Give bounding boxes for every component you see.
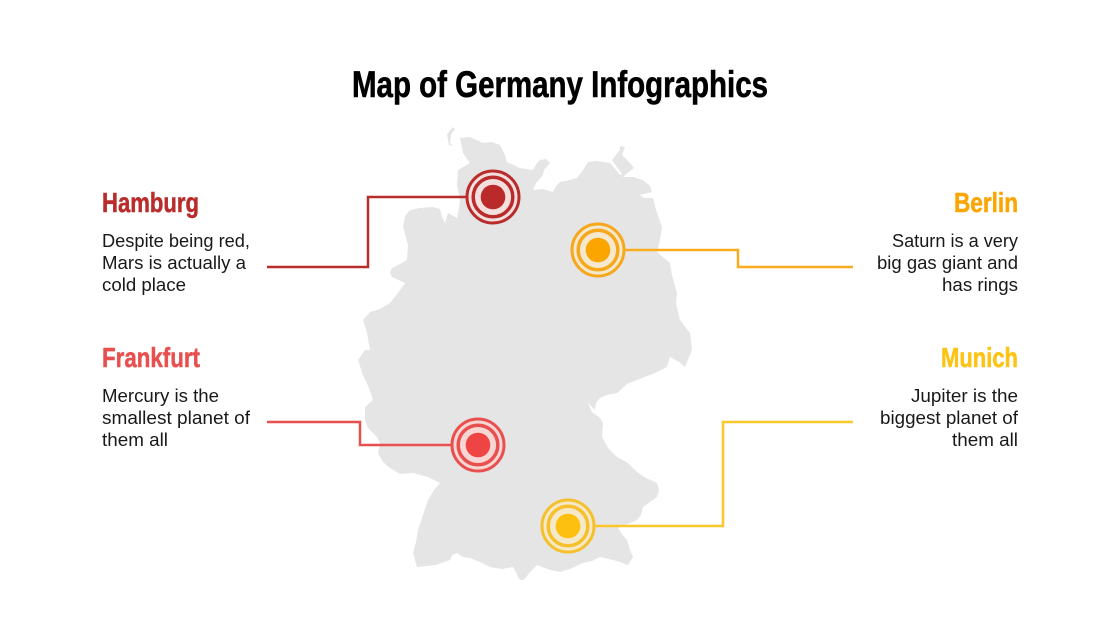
heading: Frankfurt: Frankfurt xyxy=(102,342,200,373)
text: Frankfurt description: smallest planet of xyxy=(102,408,251,428)
heading: Berlin: Berlin xyxy=(954,187,1018,218)
marker: Munich xyxy=(542,500,594,552)
text: Hamburg description: Despite being red, xyxy=(102,231,250,251)
panel: Berlin xyxy=(877,187,1018,295)
connector: Hamburg xyxy=(267,197,468,267)
text: Frankfurt description: Mercury is the xyxy=(102,386,219,406)
connector: Berlin xyxy=(623,250,853,267)
text: Munich description xyxy=(880,386,1019,450)
text: Hamburg description xyxy=(102,231,250,295)
connector: Munich xyxy=(593,422,853,526)
heading: Hamburg: Hamburg xyxy=(102,187,199,218)
text: Berlin description xyxy=(877,231,1018,295)
heading: Munich: Munich xyxy=(941,342,1018,373)
connector: Frankfurt xyxy=(267,422,453,445)
title: Map of Germany Infographics xyxy=(352,64,768,105)
marker: Berlin xyxy=(572,224,624,276)
text: Frankfurt description: them all xyxy=(102,430,168,450)
text: Berlin description: has rings xyxy=(942,275,1018,295)
text: Munich description: them all xyxy=(952,430,1018,450)
marker: Frankfurt xyxy=(452,419,504,471)
text: Frankfurt description xyxy=(102,386,251,450)
panel: Hamburg xyxy=(102,187,250,295)
text: Berlin description: Saturn is a very xyxy=(892,231,1018,251)
marker: Hamburg xyxy=(467,171,519,223)
text: Hamburg description: Mars is actually a xyxy=(102,253,247,273)
text: Berlin description: big gas giant and xyxy=(877,253,1018,273)
text: Munich description: Jupiter is the xyxy=(911,386,1018,406)
text: Hamburg description: cold place xyxy=(102,275,186,295)
text: Munich description: biggest planet of xyxy=(880,408,1019,428)
map of Germany xyxy=(358,127,692,580)
panel: Munich xyxy=(880,342,1019,450)
panel: Frankfurt xyxy=(102,342,251,450)
